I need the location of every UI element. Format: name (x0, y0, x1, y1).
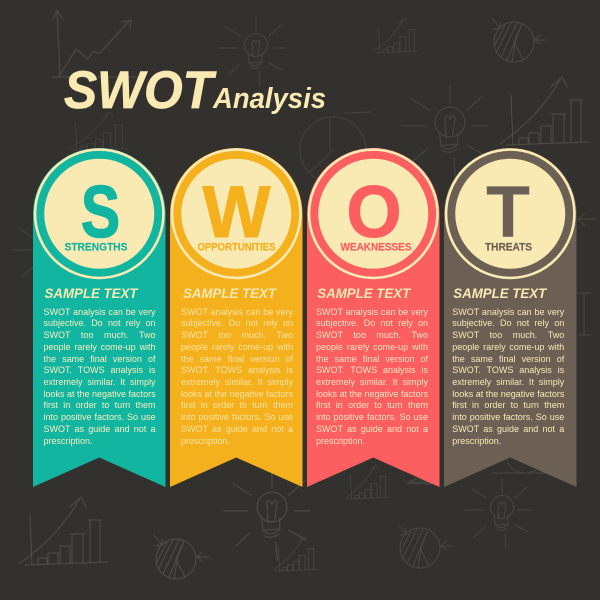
sketch: large pie centre (300, 112, 372, 183)
sketch: bottom pie left (154, 535, 209, 579)
sketch: line chart top left (52, 10, 145, 77)
text block: weaknesses: extremely similar. It simply (316, 377, 428, 387)
text block: strengths: prescription. (44, 436, 93, 446)
text block: threats: SWOT. TOWS analysis is (452, 365, 564, 375)
text block: weaknesses: subjective. Do not rely on (316, 318, 428, 328)
panel: weaknesses (307, 148, 440, 487)
ribbon: strengths (32, 148, 165, 487)
ribbon: threats (444, 148, 576, 487)
title: SWOT (64, 61, 217, 120)
sketch: small chart top right (373, 18, 418, 53)
text block: opportunities: the same final version of (181, 354, 293, 364)
sketch: pie top right (492, 18, 547, 62)
text block: opportunities: SWOT too much. Two (181, 330, 293, 340)
text block: weaknesses: looks at the negative factors (316, 389, 428, 399)
text block: opportunities (181, 307, 293, 446)
sketch: chart under red ribbon (345, 465, 390, 499)
sketch: bottom left chart (19, 497, 108, 565)
sketch: big chart right (500, 77, 589, 145)
circle badge: strengths: STRENGTHS (64, 242, 127, 254)
text block: threats: subjective. Do not rely on (452, 318, 564, 328)
text block: strengths: into positive factors. So use (44, 412, 156, 422)
text block: strengths: looks at the negative factors (44, 389, 156, 399)
text block: strengths: first in order to turn them (44, 400, 156, 410)
text block: threats: SWOT analysis can be very (452, 307, 564, 317)
text block: opportunities: extremely similar. It simply (181, 377, 293, 387)
text block: weaknesses: into positive factors. So use (316, 412, 428, 422)
sketch: bottom pie right (398, 524, 453, 568)
heading: threats: SAMPLE TEXT (453, 285, 547, 301)
heading: opportunities: SAMPLE TEXT (183, 285, 277, 301)
text block: weaknesses: first in order to turn them (316, 400, 428, 410)
circle badge: threats: T (486, 172, 530, 253)
heading: strengths: SAMPLE TEXT (44, 285, 138, 301)
text block: opportunities: people rarely come-up with (181, 342, 293, 352)
text block: opportunities: looks at the negative factors (181, 389, 293, 399)
text block: weaknesses: SWOT too much. Two (316, 330, 428, 340)
panel: threats (444, 148, 576, 487)
text block: threats: looks at the negative factors (452, 389, 564, 399)
sketch: light bulb top (219, 17, 285, 86)
text block: threats: the same final version of (452, 354, 564, 364)
sketch: partial bulb left (13, 219, 79, 288)
text block: weaknesses: SWOT analysis can be very (316, 307, 428, 317)
text block: threats: SWOT as guide and not a (452, 424, 564, 434)
circle badge: weaknesses (309, 150, 437, 278)
circle badge: strengths: S (80, 172, 120, 253)
panel: strengths (33, 148, 166, 487)
title: Analysis (212, 83, 326, 115)
text block: strengths: people rarely come-up with (44, 342, 156, 352)
text block: strengths: subjective. Do not rely on (44, 318, 156, 328)
text block: strengths (44, 307, 156, 446)
text block: strengths: SWOT analysis can be very (44, 307, 156, 317)
circle badge: threats: THREATS (485, 242, 532, 254)
circle badge: strengths (35, 150, 163, 278)
text block: opportunities: into positive factors. So use (181, 412, 293, 422)
sketch: bottom bulb centre (224, 471, 310, 560)
text block: opportunities: prescription. (181, 436, 230, 446)
sketch: chart fragment right (578, 293, 591, 335)
text block: weaknesses (316, 307, 428, 446)
panel: opportunities (170, 148, 302, 487)
text block: threats (452, 307, 564, 446)
circle badge: weaknesses: O (346, 172, 401, 253)
text block: weaknesses: prescription. (316, 436, 365, 446)
text block: threats: SWOT too much. Two (452, 330, 564, 340)
heading: weaknesses: SAMPLE TEXT (317, 285, 411, 301)
text block: weaknesses: the same final version of (316, 354, 428, 364)
text block: opportunities: subjective. Do not rely on (181, 318, 293, 328)
circle badge: opportunities: W (202, 172, 271, 253)
text block: strengths: SWOT too much. Two (44, 330, 156, 340)
sketch: bottom bulb right (465, 479, 531, 548)
text block: opportunities: SWOT. TOWS analysis is (181, 365, 293, 375)
title (64, 61, 326, 120)
circle badge: opportunities: OPPORTUNITIES (198, 242, 276, 254)
text block: threats: first in order to turn them (452, 400, 564, 410)
circle badge: threats (446, 150, 574, 278)
ribbon: weaknesses (307, 148, 439, 487)
text block: threats: prescription. (452, 436, 501, 446)
circle badge: weaknesses: WEAKNESSES (340, 242, 411, 254)
text block: strengths: extremely similar. It simply (44, 377, 156, 387)
text block: weaknesses: SWOT. TOWS analysis is (316, 365, 428, 375)
text block: threats: people rarely come-up with (452, 342, 564, 352)
text block: threats: into positive factors. So use (452, 412, 564, 422)
sketch: light bulb centre right (402, 86, 488, 175)
text block: strengths: the same final version of (44, 354, 156, 364)
text block: opportunities: SWOT analysis can be very (181, 307, 293, 317)
text block: opportunities: first in order to turn them (181, 400, 293, 410)
text block: opportunities: SWOT as guide and not a (181, 424, 293, 434)
text block: strengths: SWOT as guide and not a (44, 424, 156, 434)
text block: weaknesses: SWOT as guide and not a (316, 424, 428, 434)
sketch: fragment under red ribbon (407, 478, 432, 484)
text block: threats: extremely similar. It simply (452, 377, 564, 387)
sketch: arrow right (578, 213, 596, 226)
circle badge: opportunities (172, 150, 300, 278)
sketch: bottom small chart (273, 537, 318, 571)
ribbon: opportunities (170, 148, 302, 487)
text block: weaknesses: people rarely come-up with (316, 342, 428, 352)
sketch: bar chart under title (68, 112, 128, 150)
text block: strengths: SWOT. TOWS analysis is (44, 365, 156, 375)
sketch: fragment under brown ribbon (492, 460, 545, 473)
